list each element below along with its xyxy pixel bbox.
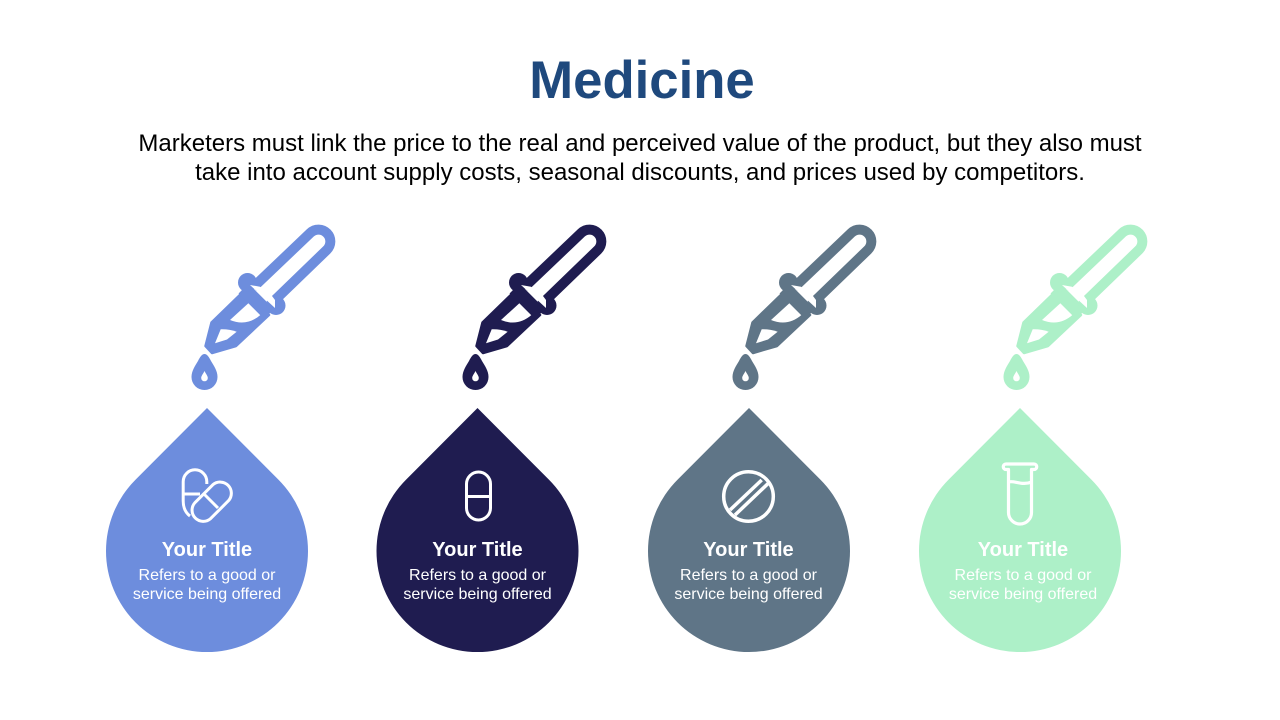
card text 3: service being offered [674,586,823,603]
card text 3: Your Title [703,539,794,561]
drop shape 2 [376,408,578,652]
card text 4: Refers to a good or [955,567,1091,584]
icon: tablet [724,472,773,521]
icon: test tube [1003,464,1037,524]
dropper 4 [1004,230,1142,390]
intro paragraph [138,130,1142,186]
icon: pill [466,472,491,520]
card text 3 [674,539,823,603]
card text 2: Refers to a good or [409,567,546,584]
drop shape 3 [648,408,850,652]
dropper 2 [462,230,601,390]
card text 3: Refers to a good or [680,567,817,584]
card text 2 [403,539,552,603]
drop shape 4 [919,408,1121,652]
card text 4 [949,539,1097,603]
dropper 3 [732,230,871,390]
card text 1: service being offered [133,586,281,603]
card text 2: Your Title [432,539,523,561]
card text 1 [133,539,281,603]
icon: capsules [183,470,231,521]
title: Medicine [529,51,755,110]
intro paragraph: Marketers must link the price to the real and perceived value of the product, but they also must [138,130,1142,157]
card text 4: Your Title [978,539,1068,561]
card text 4: service being offered [949,586,1097,603]
card text 1: Refers to a good or [139,567,275,584]
card text 2: service being offered [403,586,552,603]
card text 1: Your Title [162,539,252,561]
dropper 1 [192,230,330,390]
drop shape 1 [106,408,308,652]
intro paragraph: take into account supply costs, seasonal discounts, and prices used by competitors. [195,159,1085,186]
